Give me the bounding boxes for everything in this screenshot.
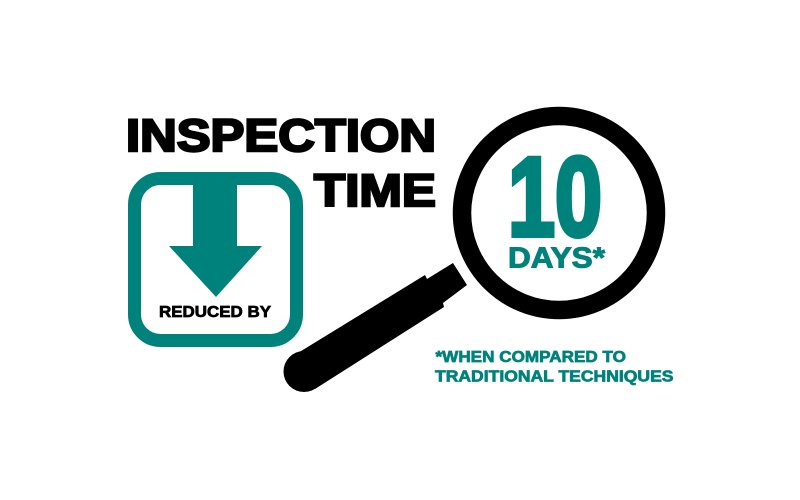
title: inspection time <box>126 110 436 216</box>
panel: reduced by box <box>134 178 296 340</box>
icon: magnifying glass <box>284 116 656 392</box>
footnote: TRADITIONAL TECHNIQUES <box>435 368 674 386</box>
stat: 10 days: DAYS* <box>508 242 606 274</box>
footnote: *WHEN COMPARED TO <box>436 349 626 366</box>
stat: 10 days: 10 <box>508 134 602 260</box>
title: inspection time: TIME <box>314 165 436 216</box>
icon: down arrow <box>169 180 262 297</box>
footnote <box>435 349 674 386</box>
label: reduced by: REDUCED BY <box>159 304 272 321</box>
title: inspection time: INSPECTION <box>126 110 436 161</box>
